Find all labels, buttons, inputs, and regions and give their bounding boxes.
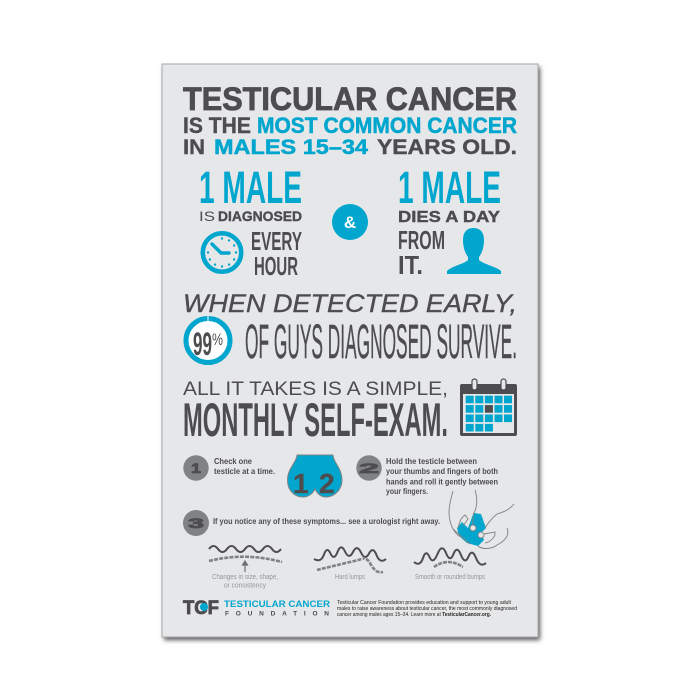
icon: 99 percent ring: % bbox=[212, 330, 223, 349]
icon: testicles diagram: 2 bbox=[319, 468, 335, 499]
title: MALES 15–34 bbox=[214, 136, 368, 159]
symptom: smooth bumps bbox=[414, 548, 486, 581]
step 2: hands and roll it gently between bbox=[386, 478, 498, 486]
symptom: changes in size: or consistency bbox=[224, 582, 266, 590]
poster shadow bbox=[164, 67, 540, 640]
icon: calendar bbox=[460, 379, 517, 436]
title: YEARS OLD. bbox=[377, 136, 517, 159]
ampersand badge: & bbox=[344, 213, 356, 232]
stat: dies a day bbox=[398, 162, 501, 280]
symptom: hard lumps: Hard lumps bbox=[335, 574, 365, 581]
icon: testicles diagram bbox=[288, 455, 342, 499]
stat: dies a day: 1 MALE bbox=[398, 162, 501, 213]
headline: self-exam bbox=[183, 378, 448, 446]
symptom: changes in size: Changes in size, shape, bbox=[212, 574, 278, 581]
stat: dies a day: FROM bbox=[398, 225, 445, 255]
stat: diagnosed every hour: 1 MALE bbox=[199, 162, 302, 213]
symptom: smooth bumps: Smooth or rounded bumps bbox=[415, 574, 485, 581]
stat: diagnosed every hour: EVERY bbox=[251, 226, 302, 256]
icon: person bust bbox=[447, 228, 501, 274]
step 3: If you notice any of these symptoms... see a urologist right away. bbox=[213, 517, 440, 526]
stat: diagnosed every hour bbox=[199, 162, 302, 281]
step 2: your fingers. bbox=[386, 487, 428, 496]
headline: self-exam: ALL IT TAKES IS A SIMPLE, bbox=[183, 378, 448, 400]
title: IN bbox=[183, 136, 205, 159]
symptom: hard lumps bbox=[314, 547, 386, 581]
logo: TCF bbox=[183, 598, 330, 619]
stat: dies a day: IT. bbox=[398, 250, 423, 280]
logo: TCF: TCF bbox=[183, 598, 219, 619]
icon: hands examining bbox=[449, 490, 514, 548]
foundation description: males to raise awareness about testicular cancer, the most commonly diagnosed bbox=[337, 606, 517, 612]
stat: diagnosed every hour: IS bbox=[199, 208, 215, 224]
foundation description bbox=[337, 600, 517, 618]
title: MOST COMMON CANCER bbox=[257, 113, 517, 138]
foundation description: cancer among males ages 15–34. Learn more at TesticularCancer.org. bbox=[337, 612, 492, 618]
icon: 99 percent ring: 99 bbox=[193, 326, 212, 362]
step 1: testicle at a time. bbox=[214, 467, 275, 476]
logo: TCF: FOUNDATION bbox=[225, 610, 329, 618]
poster panel bbox=[162, 64, 538, 637]
step 2: 2 bbox=[359, 460, 380, 476]
icon: testicles diagram: 1 bbox=[293, 468, 309, 499]
title bbox=[183, 81, 517, 159]
stat: diagnosed every hour: HOUR bbox=[254, 251, 298, 281]
step 2: Hold the testicle between bbox=[386, 457, 477, 466]
symptom: changes in size bbox=[209, 546, 282, 590]
step 1: 1 bbox=[191, 460, 201, 476]
ampersand badge bbox=[332, 204, 368, 240]
foundation description: Testicular Cancer Foundation provides education and support to young adult bbox=[337, 600, 512, 606]
step 2 bbox=[356, 455, 498, 496]
logo: TCF: TESTICULAR CANCER bbox=[224, 599, 330, 610]
step 1: Check one bbox=[214, 457, 253, 466]
title: IS THE bbox=[183, 113, 251, 138]
title: TESTICULAR CANCER bbox=[183, 81, 517, 117]
step 1 bbox=[183, 455, 275, 481]
stat: dies a day: DIES A DAY bbox=[398, 209, 500, 226]
stat: diagnosed every hour: DIAGNOSED bbox=[218, 208, 302, 224]
step 3: 3 bbox=[188, 515, 204, 531]
headline: self-exam: MONTHLY SELF-EXAM. bbox=[183, 393, 448, 446]
icon: 99 percent ring bbox=[186, 316, 230, 362]
icon: clock bbox=[203, 233, 241, 272]
step 3 bbox=[183, 510, 440, 536]
step 2: your thumbs and fingers of both bbox=[386, 467, 498, 476]
headline: when detected early: WHEN DETECTED EARLY, bbox=[183, 290, 517, 318]
